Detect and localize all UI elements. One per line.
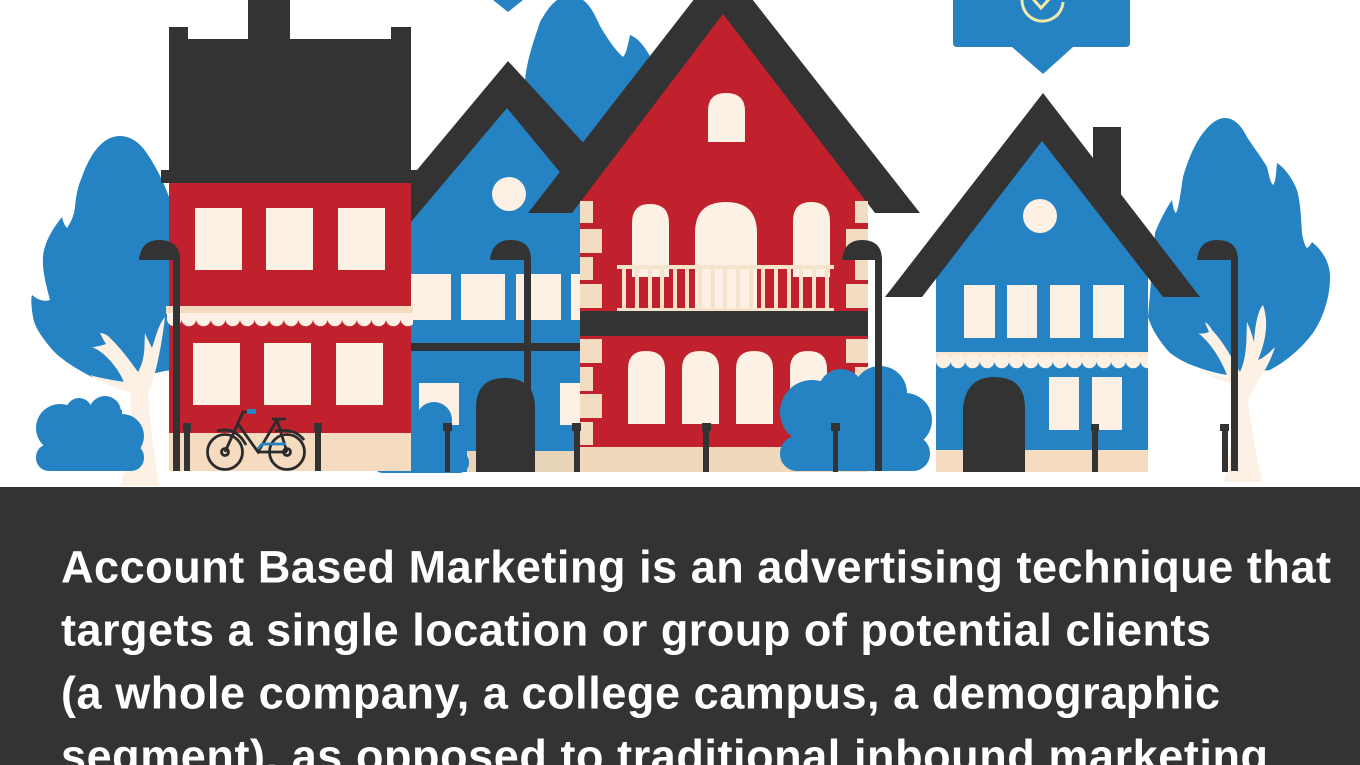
bush: left	[36, 396, 144, 471]
body text: Account Based Marketing is an advertising technique that	[61, 542, 1331, 592]
house: black-roof red building	[161, 0, 413, 471]
tree: back centre	[520, 0, 650, 150]
street lamp	[490, 240, 531, 400]
callout marker: left, cut by top edge	[493, 0, 523, 12]
house: blue right	[885, 93, 1200, 472]
house: large red centre	[528, 0, 920, 472]
door	[476, 378, 535, 472]
body text: (a whole company, a college campus, a demographic	[61, 668, 1220, 718]
street lamps	[139, 240, 1238, 471]
house: blue middle	[373, 61, 590, 473]
body text	[61, 542, 1331, 765]
balcony railing	[617, 265, 834, 311]
tree: right	[1148, 118, 1330, 482]
bicycle	[208, 409, 304, 470]
awning	[936, 352, 1148, 369]
small bush	[373, 402, 469, 473]
icon: check badge	[1022, 0, 1063, 21]
tree: left	[31, 136, 172, 486]
arched windows	[628, 93, 830, 424]
quoins	[580, 201, 868, 445]
body text: targets a single location or group of potential clients	[61, 604, 1211, 656]
awning	[166, 306, 413, 327]
text panel	[0, 487, 1360, 765]
callout marker: right with check icon	[953, 0, 1130, 74]
door	[963, 377, 1025, 472]
bollards	[183, 423, 1229, 472]
bush: centre	[780, 366, 932, 471]
